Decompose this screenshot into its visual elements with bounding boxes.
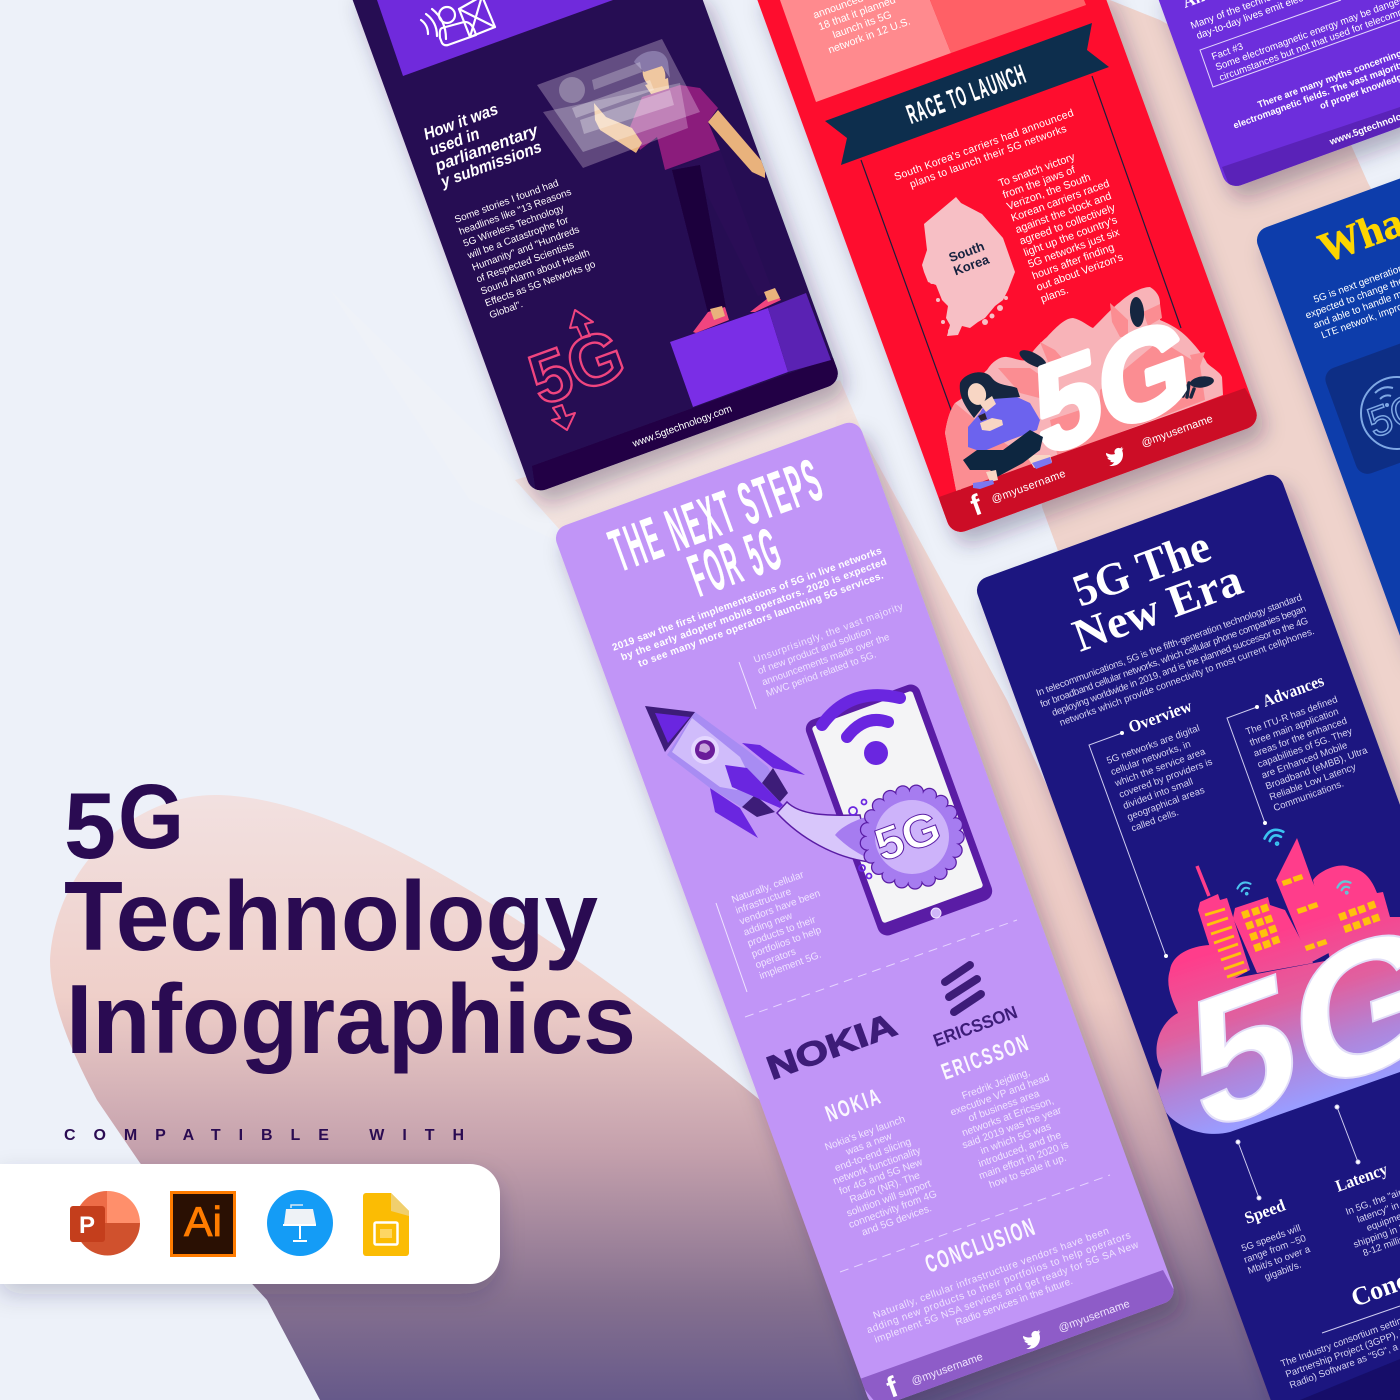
advances column: Advances <box>1260 671 1327 711</box>
card: the next steps for 5G (lilac): THE NEXT STEPS <box>602 446 832 584</box>
intro: In telecommunications, 5G is the fifth-generation technology standard <box>1035 592 1304 699</box>
lead paragraph: by the early adopter mobile operators. 2020 is expected <box>620 557 888 663</box>
advances column: areas for the enhanced <box>1252 716 1349 760</box>
column: Nokia: for 4G and 5G New <box>838 1157 925 1197</box>
illustration: man with hologram screens <box>537 39 781 333</box>
divider and text: vendors: portfolios to help <box>750 925 823 960</box>
body text: 5G Wireless Technology <box>462 203 566 250</box>
conclusion <box>861 1213 1145 1358</box>
body text: Korean carriers raced <box>1010 178 1111 224</box>
illustration: 5G with leaves <box>945 287 1223 495</box>
illustration: 5G cloud with rocket trail: 5G <box>868 800 947 871</box>
intro: deploying worldwide in 2019, and is the planned successor to the 4G <box>1050 615 1310 719</box>
body text: Some stories I found had <box>453 178 560 226</box>
icon: Illustrator <box>172 1192 234 1256</box>
advances column: Communications. <box>1272 778 1345 814</box>
column: Nokia: was a new <box>844 1131 894 1158</box>
overview column: divided into small <box>1122 776 1195 812</box>
frame lines <box>861 76 1181 418</box>
body text: from the jaws of <box>1001 164 1078 201</box>
divider and text: vendors: products to their <box>746 914 818 949</box>
overview column: covered by providers is <box>1118 757 1214 801</box>
column: Nokia: and 5G devices. <box>860 1203 933 1239</box>
column: Nokia: solution will support <box>845 1179 933 1219</box>
compatible with label: COMPATIBLE WITH <box>64 1127 464 1144</box>
conclusion <box>1279 1243 1400 1392</box>
conclusion: adding new products to their portfolios to help operators <box>865 1230 1132 1336</box>
logo: Ericsson: ERICSSON <box>931 1002 1020 1051</box>
column: speed: 5G speeds will <box>1240 1223 1302 1254</box>
body text: plans. <box>1039 284 1070 305</box>
column: Ericsson: in which 5G was <box>979 1121 1053 1157</box>
icon: person, wifi and map <box>421 0 495 45</box>
advances column: The ITU-R has defined <box>1244 694 1339 738</box>
fact text <box>1180 0 1400 148</box>
purple header band <box>377 0 613 76</box>
divider and text: announcements: of new product and solution <box>756 626 873 677</box>
card: the next steps for 5G (lilac) <box>540 400 1190 1400</box>
overview column: called cells. <box>1130 807 1180 834</box>
ribbon title: RACE TO LAUNCH <box>903 59 1031 130</box>
map: South Korea: Korea <box>951 251 992 278</box>
column: Nokia: end-to-end slicing <box>833 1136 913 1174</box>
divider and text: vendors: operators <box>754 946 798 971</box>
card: race to launch (red) <box>700 0 1270 550</box>
heading: How it was <box>421 100 501 144</box>
footer social: @myusername <box>910 1351 985 1388</box>
advances column: are Enhanced Mobile <box>1260 740 1349 781</box>
conclusion: CONCLUSION <box>921 1213 1040 1279</box>
card: myths and facts (purple) <box>1156 0 1400 208</box>
column: Nokia: Nokia's key launch <box>824 1114 907 1153</box>
pointer lines <box>1236 1105 1360 1200</box>
body text: Humanity" and "Hundreds <box>471 224 581 274</box>
footer band <box>939 388 1257 532</box>
neon 5G with arrows: 5G <box>519 314 635 421</box>
footer social <box>882 1298 1132 1400</box>
column: Ericsson: ERICSSON <box>938 1029 1033 1085</box>
body text: Verizon, the South <box>1005 171 1092 213</box>
overview column: geographical areas <box>1126 785 1206 823</box>
footer social: f <box>966 489 987 523</box>
advances column: three main application <box>1248 706 1340 749</box>
conclusion: Naturally, cellular infrastructure vendors have been <box>872 1226 1110 1322</box>
salmon panels <box>780 0 1086 102</box>
column: speed: range from ~50 <box>1243 1233 1308 1266</box>
column: speed <box>1238 1195 1316 1288</box>
column: Ericsson: how to scale it up. <box>988 1153 1068 1191</box>
logo: Nokia: NOKIA <box>762 1006 901 1087</box>
body text: Effects as 5G Networks go <box>484 259 598 309</box>
card: what is 5G (blue) <box>1256 178 1400 656</box>
divider and text: vendors: adding new <box>742 910 795 939</box>
body text: agreed to collectively <box>1018 202 1117 248</box>
main title: Infographics <box>66 964 636 1074</box>
main title <box>64 766 636 1074</box>
body text: against the clock and <box>1014 190 1113 236</box>
icon: Illustrator: Ai <box>184 1198 222 1245</box>
card: parliamentary submissions (dark purple) <box>330 0 870 520</box>
pedestal <box>670 293 831 407</box>
divider and text: announcements: MWC period related to 5G. <box>765 649 878 700</box>
divider and text: announcements: announcements made over the <box>760 632 892 688</box>
body text: Global". <box>488 299 524 321</box>
panel: compatible apps <box>0 1164 500 1284</box>
advances column: Broadband (eMBB), Ultra <box>1264 745 1370 792</box>
column: Ericsson: of business area <box>967 1088 1041 1124</box>
conclusion: implement 5G NSA services and get ready for 5G SA New <box>873 1239 1141 1346</box>
advances column <box>1227 671 1378 825</box>
body text: To snatch victory <box>997 151 1077 190</box>
illustration: seated woman <box>957 372 1052 490</box>
advances column: capabilities of 5G. They <box>1256 726 1354 771</box>
divider and text: vendors <box>716 872 821 992</box>
intro: networks which provide connectivity to most current cellphones. <box>1058 626 1316 729</box>
body text <box>454 179 595 318</box>
website: www.5gtechnology.com <box>630 404 734 450</box>
overview column: which the service area <box>1113 746 1208 790</box>
card: 5G the new era (navy) <box>960 460 1400 1400</box>
column: Ericsson: executive VP and head <box>949 1072 1051 1119</box>
body text: Sound Alarm about Health <box>479 248 591 297</box>
title: 5G The <box>1066 520 1217 616</box>
fact box <box>1200 0 1400 87</box>
body text: hours after finding <box>1031 241 1116 282</box>
column: Nokia: NOKIA <box>822 1082 885 1127</box>
main title: G <box>118 766 184 868</box>
illustration: 5G with leaves: 5G <box>1029 289 1196 482</box>
illustration: rocket <box>645 706 805 838</box>
advances column: Reliable Low Latency <box>1268 762 1358 803</box>
footer social: @myusername <box>1057 1298 1132 1335</box>
body text: 5G networks just six <box>1026 226 1122 271</box>
map: South Korea <box>922 197 1015 336</box>
icon: Keynote <box>267 1190 333 1256</box>
column: Nokia <box>824 1089 936 1236</box>
column: Nokia: Radio (NR). The <box>848 1170 922 1206</box>
column: latency: Latency <box>1333 1159 1391 1196</box>
lead paragraph: to see many more operators launching 5G services. <box>637 570 885 670</box>
column: Nokia: connectivity from 4G <box>847 1189 938 1231</box>
overview column: 5G networks are digital <box>1105 723 1201 767</box>
divider and text: vendors: implement 5G. <box>758 950 823 982</box>
column: latency <box>1333 1159 1400 1261</box>
column: latency: latency" in <box>1356 1200 1400 1226</box>
overview column: Overview <box>1126 696 1195 737</box>
icon: PowerPoint <box>70 1191 140 1256</box>
illustration: 5G cloud with rocket trail <box>777 792 957 882</box>
icon: PowerPoint: P <box>79 1212 95 1239</box>
column: speed: gigabit/s. <box>1263 1260 1303 1283</box>
illustration: phone with wifi <box>803 682 995 938</box>
title: New Era <box>1066 553 1249 661</box>
title: FOR 5G <box>681 514 791 609</box>
footer social: @myusername <box>1140 413 1215 450</box>
salmon panels: launch its 5G <box>831 9 893 41</box>
icon tile <box>1325 344 1400 474</box>
main title: Technology <box>64 861 598 971</box>
logo: Ericsson <box>931 965 1020 1051</box>
body text: of Respected Scientists <box>475 240 576 285</box>
overview column: cellular networks, in <box>1109 739 1192 778</box>
conclusion: Radio services in the future. <box>954 1276 1074 1329</box>
column: Ericsson: introduced, and the <box>977 1130 1063 1170</box>
column: speed: Mbit/s to over a <box>1246 1244 1312 1277</box>
intro: for broadband cellular networks, which cellular phone companies began <box>1039 604 1308 710</box>
column: Ericsson: Fredrik Jejdling, <box>960 1067 1032 1102</box>
divider and text: vendors: vendors have been <box>738 888 822 928</box>
body text: will be a Catastrophe for <box>465 215 571 262</box>
title <box>606 460 822 597</box>
column: Nokia: network functionality <box>832 1145 923 1187</box>
divider and text: announcements: Unsurprisingly, the vast majority <box>752 601 905 666</box>
divider and text: vendors: Naturally, cellular <box>730 869 806 906</box>
map: South Korea: South <box>947 238 986 265</box>
icon: Google Slides <box>363 1193 409 1256</box>
body text: out about Verizon's <box>1035 251 1125 294</box>
heading: y submissions <box>438 138 544 191</box>
heading: used in <box>427 125 482 160</box>
lead paragraph: 2019 saw the first implementations of 5G in live networks <box>611 545 884 654</box>
body text <box>998 154 1123 304</box>
column: Ericsson: said 2019 was the year <box>961 1105 1064 1151</box>
body text: light up the country's <box>1022 214 1120 259</box>
intro text: South Korea's carriers had announced <box>893 107 1075 183</box>
column: Ericsson: main effort in 2020 is <box>978 1140 1070 1182</box>
heading <box>424 106 542 191</box>
footer social <box>970 416 1212 516</box>
overview column <box>1089 696 1227 958</box>
column: Ericsson <box>940 1034 1068 1188</box>
icon: wifi <box>1263 827 1287 848</box>
intro text: plans to launch their 5G networks <box>908 123 1068 191</box>
footer social: @myusername <box>990 468 1067 506</box>
heading: parliamentary <box>432 121 541 176</box>
salmon panels: network in 12 U.S. <box>827 15 912 56</box>
fact text: Fact #3 <box>1210 41 1245 63</box>
body text: headlines like "13 Reasons <box>458 187 573 238</box>
column: Ericsson: networks at Ericsson, <box>961 1096 1055 1139</box>
main title: 5 <box>64 773 116 878</box>
divider and text: vendors: infrastructure <box>734 886 793 917</box>
divider and text: announcements <box>739 601 917 709</box>
column: speed: Speed <box>1242 1195 1288 1228</box>
ribbon title <box>825 23 1109 165</box>
